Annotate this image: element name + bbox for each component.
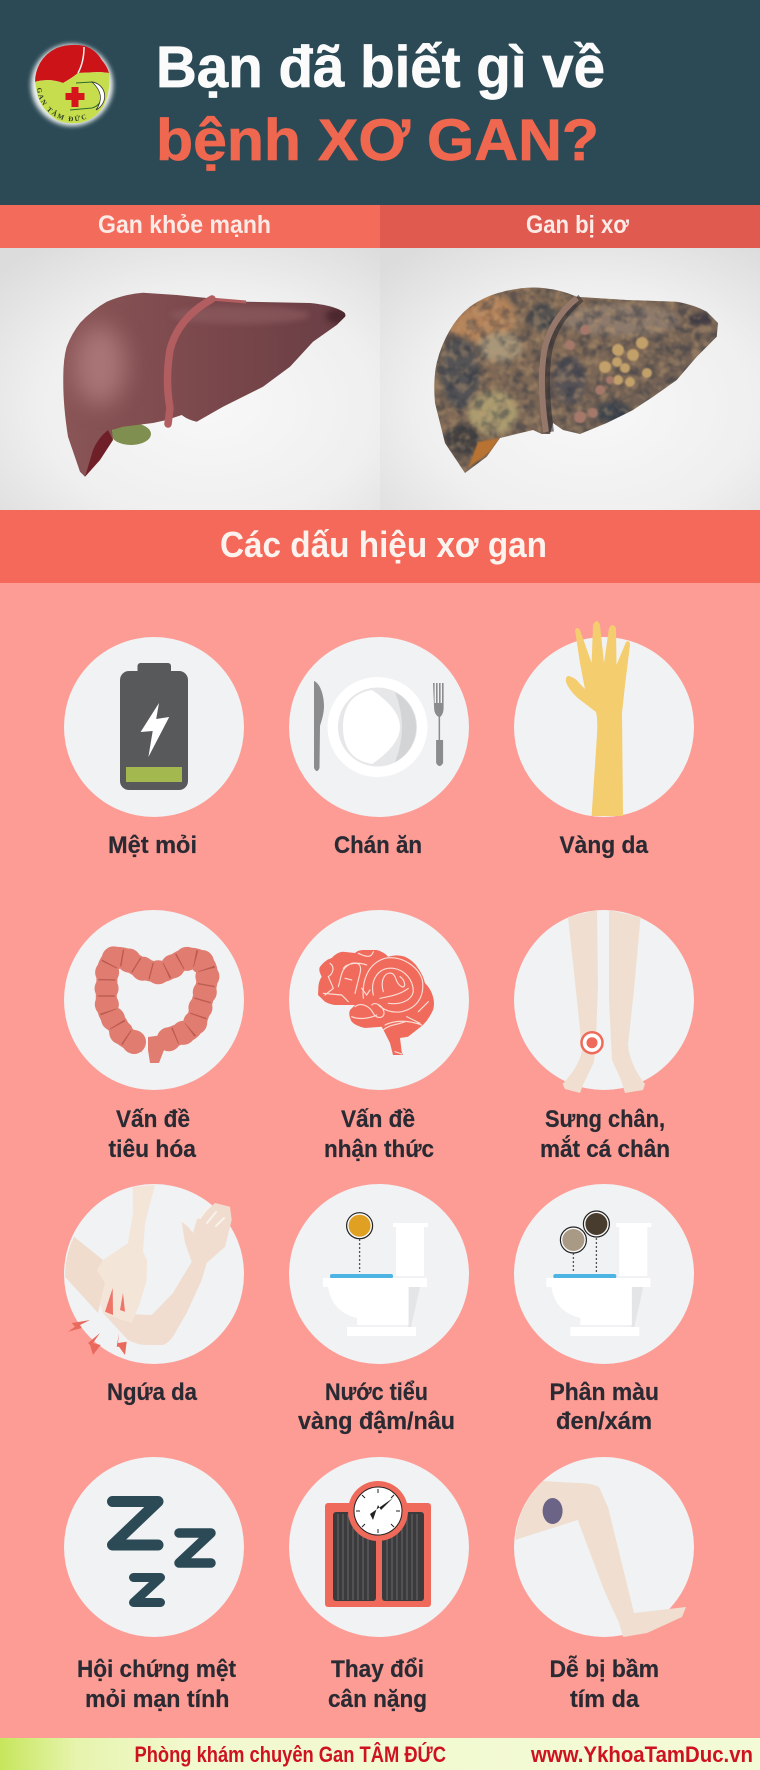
ligament xyxy=(546,298,581,432)
label xyxy=(550,1655,659,1713)
label: Vàng da xyxy=(560,832,649,859)
comparison column headings: Gan bị xơ xyxy=(526,211,629,239)
icon: plate and cutlery xyxy=(314,677,444,777)
label: mỏi mạn tính xyxy=(85,1686,230,1713)
comparison column headings: Gan khỏe mạnh xyxy=(98,211,271,239)
label: Sưng chân, xyxy=(545,1106,665,1133)
section heading band: Các dấu hiệu xơ gan xyxy=(220,524,547,565)
panel: healthy liver xyxy=(0,248,380,510)
item: dark urine xyxy=(289,1184,469,1435)
label: Hội chứng mệt xyxy=(77,1656,236,1683)
label: Nước tiểu xyxy=(325,1379,428,1406)
title: bệnh XƠ GAN? xyxy=(156,108,599,173)
label: nhận thức xyxy=(324,1136,434,1163)
label: cân nặng xyxy=(328,1686,427,1713)
mottled liver surface xyxy=(430,285,725,480)
item: chronic fatigue xyxy=(64,1457,244,1713)
falciform ligament xyxy=(168,299,212,424)
section heading band xyxy=(0,510,760,583)
label: Vấn đề xyxy=(341,1106,415,1133)
label: Dễ bị bầm xyxy=(550,1655,659,1683)
icon: bruised leg xyxy=(515,1481,686,1637)
label: Mệt mỏi xyxy=(108,832,197,859)
icon: yellow hand xyxy=(566,621,630,816)
label xyxy=(298,1379,455,1435)
item: swollen legs xyxy=(514,910,694,1163)
label xyxy=(540,1106,670,1163)
icon: scratching arms xyxy=(65,1185,232,1355)
item: cognitive problems xyxy=(289,910,469,1163)
label: Vấn đề xyxy=(116,1106,190,1133)
item: itchy skin xyxy=(64,1184,244,1406)
icon: bathroom scale xyxy=(325,1481,431,1607)
icon: colon xyxy=(106,957,207,1063)
label xyxy=(77,1656,236,1713)
header panel xyxy=(0,0,760,205)
item: loss of appetite xyxy=(289,637,469,859)
title xyxy=(156,35,605,173)
label: Phân màu xyxy=(550,1379,659,1406)
footer bar: Phòng khám chuyên Gan TÂM ĐỨC xyxy=(134,1742,446,1767)
item: jaundice xyxy=(514,621,694,859)
label: Thay đổi xyxy=(331,1656,424,1683)
footer bar xyxy=(0,1738,760,1770)
icon: sleeping Z letters xyxy=(112,1502,211,1602)
item: easy bruising xyxy=(514,1457,694,1713)
icon: legs with target xyxy=(563,910,645,1093)
item: dark stool xyxy=(514,1184,694,1435)
label: tiêu hóa xyxy=(108,1136,197,1163)
comparison column headings xyxy=(0,205,760,248)
label xyxy=(550,1379,659,1435)
label xyxy=(328,1656,427,1713)
label: mắt cá chân xyxy=(540,1135,670,1163)
item: weight change xyxy=(289,1457,469,1713)
item: digestive problems xyxy=(64,910,244,1163)
liver shape xyxy=(60,288,354,483)
label: tím da xyxy=(570,1686,640,1713)
item: fatigue xyxy=(64,637,244,859)
icon: toilet with amber sample xyxy=(323,1213,428,1336)
logo: Gan Tâm Đức xyxy=(27,40,117,130)
logo: Gan Tâm Đức: GAN TÂM ĐỨC xyxy=(37,88,86,122)
label: Chán ăn xyxy=(334,832,422,859)
icon: battery xyxy=(120,663,188,790)
label: vàng đậm/nâu xyxy=(298,1408,455,1435)
title: Bạn đã biết gì về xyxy=(156,35,605,100)
label xyxy=(324,1106,434,1163)
label xyxy=(108,1106,197,1163)
label: đen/xám xyxy=(556,1408,652,1435)
panel: cirrhotic liver xyxy=(380,248,760,510)
icon: brain xyxy=(318,950,434,1055)
icon: toilet with dark samples xyxy=(546,1211,651,1336)
gallbladder xyxy=(111,423,151,445)
label: Ngứa da xyxy=(107,1379,198,1406)
